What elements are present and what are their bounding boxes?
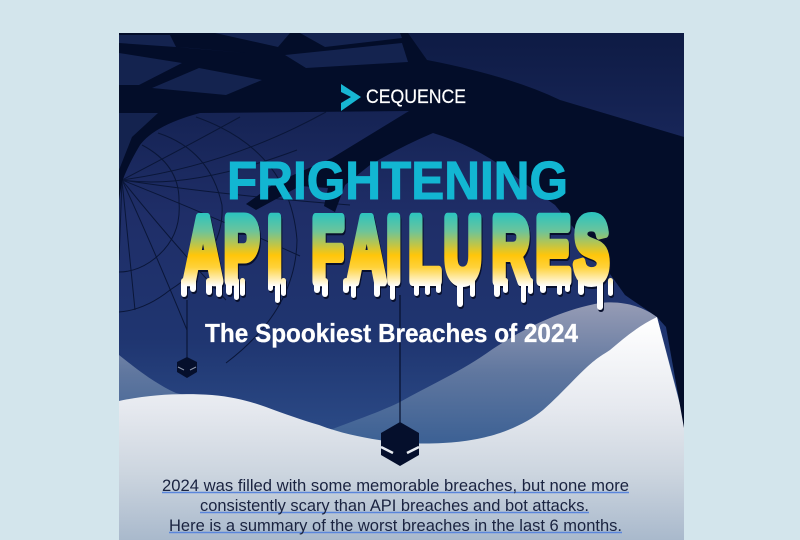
night sky background: [119, 33, 684, 430]
front snowy hill: [119, 317, 684, 540]
spider thread small: [186, 300, 188, 358]
title: frightening: FRIGHTENING: [227, 151, 568, 211]
icon: logo chevron: [341, 84, 361, 111]
logo: [341, 84, 466, 111]
logo wordmark: CEQUENCE: [366, 86, 466, 108]
spider thread large: [399, 295, 401, 424]
intro text: 2024 was filled with some memorable breaches, but none more: [162, 476, 629, 495]
infographic header panel: [119, 33, 684, 540]
tree silhouette: [119, 33, 684, 428]
intro text: consistently scary than API breaches and bot attacks.: [200, 496, 589, 515]
intro text: Here is a summary of the worst breaches in the last 6 months.: [169, 516, 622, 535]
title: dripping api failures: APIFAILURES: [184, 197, 609, 301]
subtitle: The Spookiest Breaches of 2024: [205, 318, 579, 348]
icon: small spider: [177, 357, 197, 378]
intro text: [162, 476, 629, 535]
icon: large spider: [381, 422, 419, 466]
spider web: [119, 112, 350, 363]
back hill: [119, 302, 680, 444]
sky gaps between branches: [119, 33, 408, 170]
underlines: [162, 492, 629, 532]
